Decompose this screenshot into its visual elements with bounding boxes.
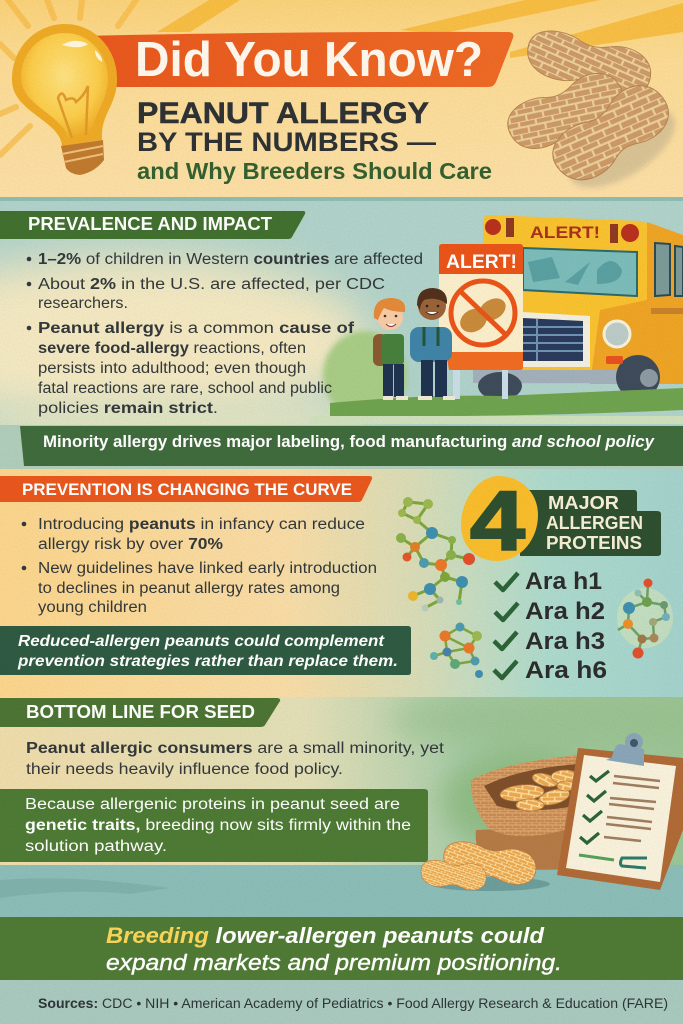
callout: genetic traits: Because allergenic proteins in peanut seed are <box>25 796 400 813</box>
callout: genetic traits: genetic traits, breeding now sits firmly within the <box>25 817 411 834</box>
callout: breeding lower-allergen peanuts: expand markets and premium positioning. <box>106 950 562 975</box>
text block: prevention bullets: Introducing peanuts in infancy can reduce <box>38 516 365 533</box>
illustration: school bus <box>473 215 683 400</box>
text block: peanut allergic consumers: Peanut allergic consumers are a small minority, yet <box>26 740 445 757</box>
text block: prevalence bullets: researchers. <box>38 295 128 312</box>
list: allergen proteins: Ara h6 <box>525 657 607 684</box>
text block: prevalence bullets: About 2% in the U.S. are affected, per CDC <box>38 276 385 293</box>
panel: header background <box>0 0 683 197</box>
heading: prevalence and impact: PREVALENCE AND IMPACT <box>28 214 272 234</box>
panel: prevention background <box>0 469 683 697</box>
child: right boy <box>410 288 455 400</box>
list: allergen proteins: Ara h2 <box>525 598 605 625</box>
text block: prevalence bullets: severe food-allergy reactions, often <box>38 340 306 357</box>
list: allergen proteins <box>494 568 607 684</box>
illustration: loose peanuts <box>420 839 538 891</box>
callout: genetic traits <box>0 789 428 862</box>
list: allergen proteins: Ara h3 <box>525 628 605 655</box>
heading: bottom line for seed <box>0 698 280 727</box>
illustration: three peanuts <box>501 26 683 204</box>
footer: sources <box>0 980 683 1024</box>
heading: peanut allergy by the numbers: PEANUT ALLERGY <box>137 97 429 130</box>
text block: prevalence bullets: Peanut allergy is a common cause of <box>38 320 355 337</box>
stat badge: 4 major allergen proteins: 4 <box>470 474 525 568</box>
text block: peanut allergic consumers: their needs heavily influence food policy. <box>26 761 343 778</box>
icon: small molecule <box>430 622 483 678</box>
text block: prevalence bullets: 1–2% of children in Western countries are affected <box>38 251 423 268</box>
stat badge: 4 major allergen proteins <box>461 474 661 568</box>
text block: prevention bullets: New guidelines have linked early introduction <box>38 560 377 577</box>
icon: light bulb <box>12 24 117 175</box>
text block: prevalence bullets: persists into adulthood; even though <box>38 360 306 377</box>
panel: prevalence and impact background <box>0 197 683 469</box>
text block: prevalence bullets <box>27 251 423 417</box>
heading: prevalence and impact <box>0 211 305 239</box>
illustration: grass and hill <box>310 331 683 424</box>
banner: Did You Know?: Did You Know? <box>135 33 483 87</box>
illustration: two children <box>373 288 455 400</box>
illustration: checklist clipboard <box>557 733 683 890</box>
footer: sources: Sources: CDC • NIH • American Academy of Pediatrics • Food Allergy Research & Education (FARE) <box>38 996 668 1011</box>
list: allergen proteins: Ara h1 <box>525 568 602 595</box>
callout: genetic traits: solution pathway. <box>25 838 167 855</box>
callout: breeding lower-allergen peanuts <box>0 917 683 980</box>
panel: bottom line background <box>0 690 683 867</box>
text block: prevention bullets <box>22 516 377 616</box>
callout: minority allergy band: Minority allergy drives major labeling, food manufacturing and school policy <box>43 432 656 451</box>
text block: prevalence bullets: fatal reactions are rare, school and public <box>38 380 332 397</box>
callout: reduced-allergen peanuts: Reduced-allergen peanuts could complement <box>18 633 385 650</box>
text block: prevention bullets: allergy risk by over 70% <box>38 536 223 553</box>
callout: minority allergy band <box>20 426 683 466</box>
sign: alert no peanuts: ALERT! <box>446 252 517 273</box>
heading: peanut allergy by the numbers <box>137 97 492 184</box>
heading: peanut allergy by the numbers: and Why Breeders Should Care <box>137 158 492 184</box>
text block: prevention bullets: young children <box>38 599 147 616</box>
heading: peanut allergy by the numbers: BY THE NUMBERS — <box>137 127 436 157</box>
heading: bottom line for seed: BOTTOM LINE FOR SEED <box>26 702 255 722</box>
text block: prevention bullets: to declines in peanut allergy rates among <box>38 580 340 597</box>
illustration: burlap sack of peanuts <box>430 755 580 891</box>
sign: alert no peanuts <box>439 244 523 399</box>
stat badge: 4 major allergen proteins: PROTEINS <box>546 533 642 553</box>
text block: prevalence bullets: policies remain strict . <box>38 400 218 417</box>
child: left boy <box>373 298 408 400</box>
panel: teal floor strip <box>0 865 683 917</box>
icon: large molecule <box>396 497 475 612</box>
icon: right molecule <box>617 578 673 658</box>
callout: reduced-allergen peanuts: prevention strategies rather than replace them. <box>17 653 398 670</box>
stat badge: 4 major allergen proteins: ALLERGEN <box>546 513 643 533</box>
callout: breeding lower-allergen peanuts: Breeding lower-allergen peanuts could <box>106 923 545 948</box>
heading: prevention is changing the curve <box>0 476 372 502</box>
heading: prevention is changing the curve: PREVENTION IS CHANGING THE CURVE <box>22 480 352 499</box>
callout: reduced-allergen peanuts <box>0 626 411 675</box>
text block: peanut allergic consumers <box>26 740 445 778</box>
illustration: school bus: ALERT! <box>530 223 600 242</box>
stat badge: 4 major allergen proteins: MAJOR <box>548 493 619 513</box>
